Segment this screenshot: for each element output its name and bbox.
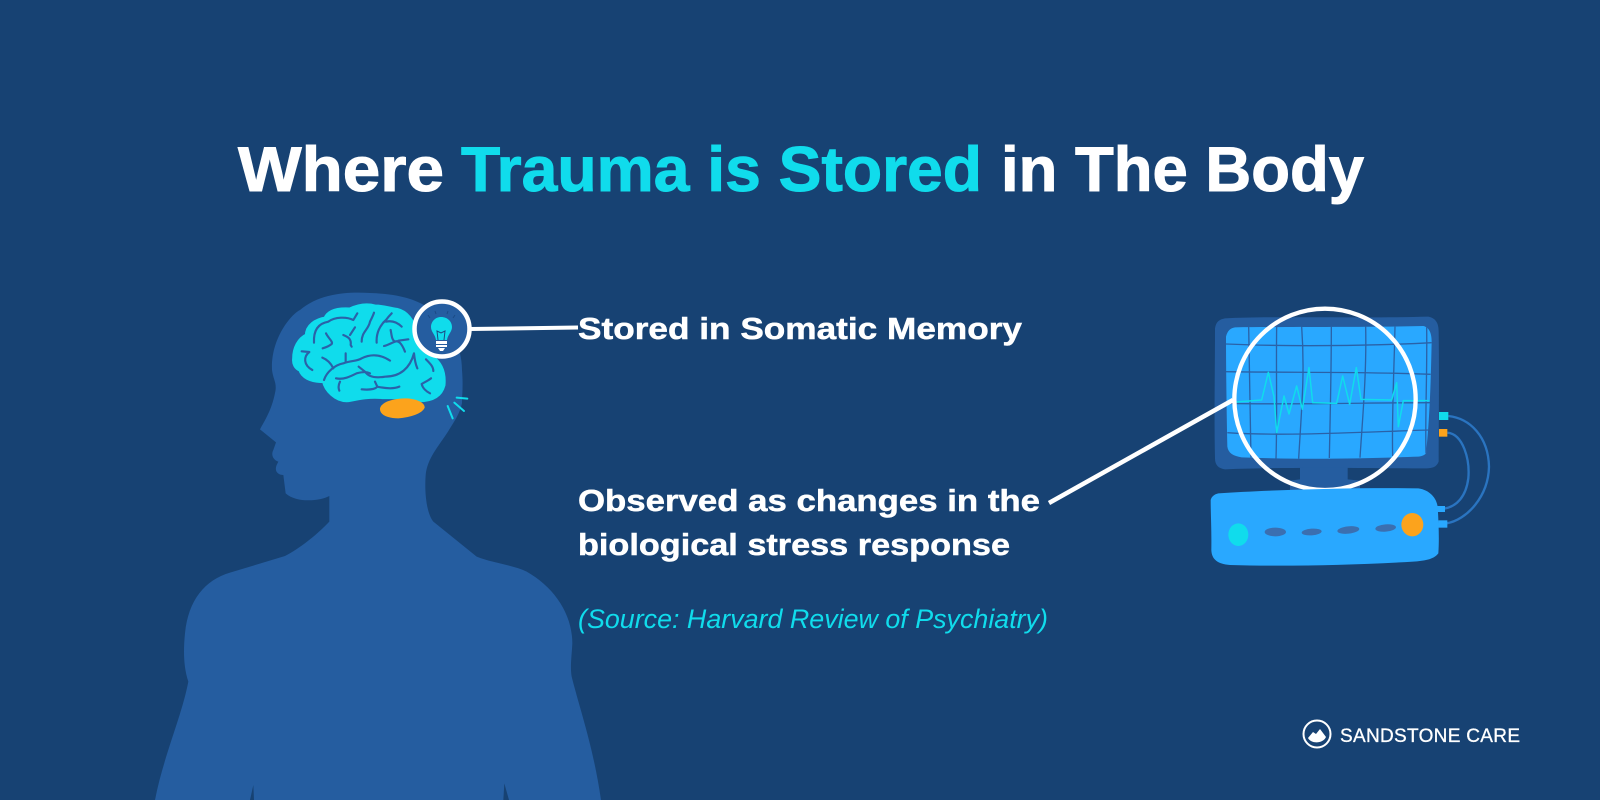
logo mark [1304, 720, 1330, 748]
brain illustration [295, 306, 467, 418]
title: in The Body [1001, 135, 1364, 205]
lens circle [414, 302, 470, 356]
label: biological stress response: Observed as changes in the [578, 483, 1040, 518]
title [238, 135, 1364, 205]
cable connectors [1437, 412, 1448, 528]
connector line to monitor [1049, 400, 1233, 503]
title: Trauma is Stored [461, 135, 982, 205]
icon: lightbulb [428, 311, 455, 351]
cables [1444, 416, 1489, 523]
brain folds [302, 313, 433, 393]
base controls [1228, 513, 1423, 546]
connector line to somatic memory label [470, 328, 578, 329]
monitor stand [1290, 467, 1360, 490]
monitor illustration [1211, 309, 1489, 566]
source note: (Source: Harvard Review of Psychiatry) [578, 604, 1048, 634]
ECG waveform [1237, 368, 1429, 433]
amygdala highlight [380, 398, 425, 418]
label: somatic memory: Stored in Somatic Memory [578, 311, 1023, 346]
logo: Sandstone Care [1304, 720, 1520, 748]
lightbulb callout [414, 302, 470, 356]
screen grid [1226, 327, 1432, 459]
monitor screen [1226, 326, 1432, 459]
brain shape [295, 306, 443, 400]
spark ticks [448, 398, 467, 418]
title: Where [238, 135, 444, 205]
label: biological stress response [578, 483, 1040, 562]
human silhouette [155, 293, 601, 800]
monitor bezel [1215, 317, 1439, 469]
base unit [1211, 488, 1439, 566]
logo wordmark: SANDSTONE CARE [1340, 726, 1520, 747]
label: biological stress response: biological stress response [578, 527, 1010, 562]
magnifier lens [1234, 309, 1416, 490]
